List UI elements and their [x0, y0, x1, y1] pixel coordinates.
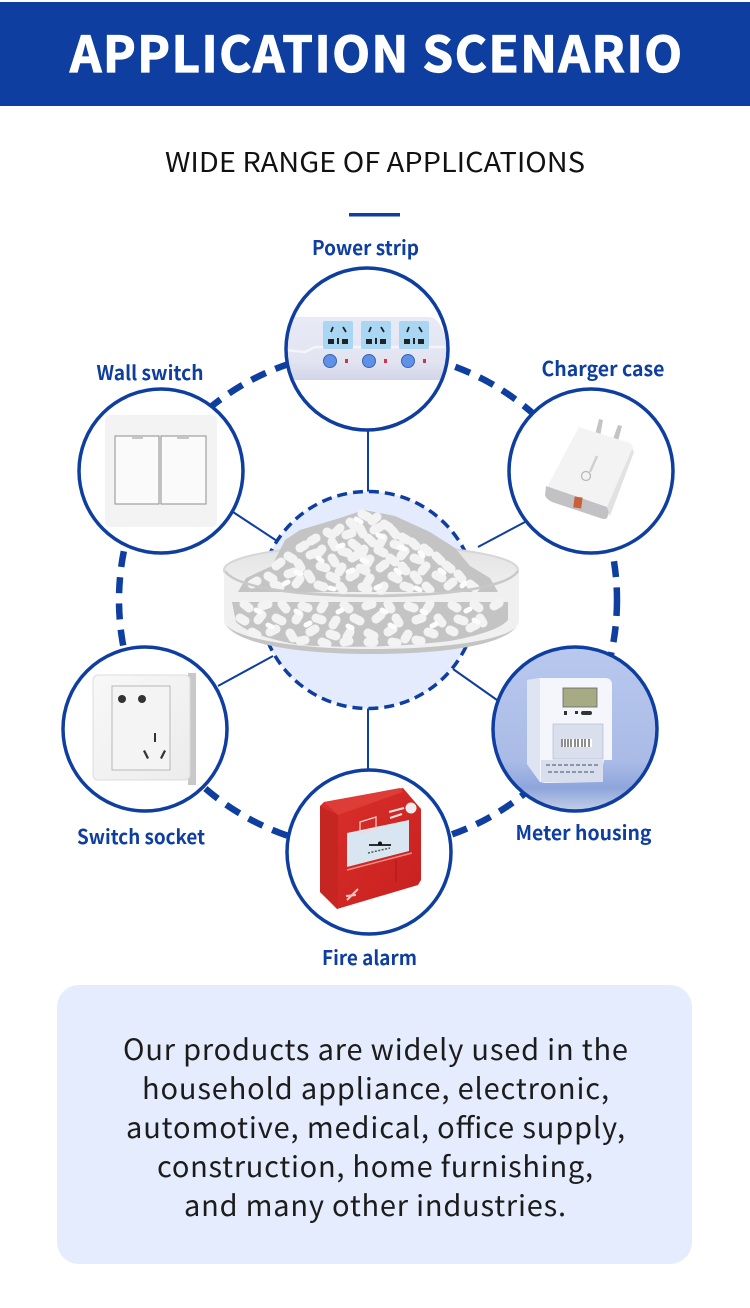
description text	[123, 1027, 628, 1225]
panel: meter housing	[493, 647, 657, 811]
strip body	[285, 317, 450, 380]
description text: construction, home furnishing,	[157, 1144, 593, 1186]
LCD screen	[563, 688, 597, 707]
switch plate	[105, 415, 217, 527]
prongs	[595, 419, 622, 441]
socket face	[112, 686, 170, 770]
switches	[324, 354, 414, 368]
description text: and many other industries.	[184, 1183, 566, 1225]
panel: charger case	[509, 389, 673, 553]
panel: switch socket	[63, 647, 227, 811]
dish body	[224, 570, 519, 653]
panel: wall switch	[79, 389, 243, 553]
terminal block	[541, 760, 603, 782]
socket plate	[188, 673, 196, 785]
dish rim	[225, 571, 518, 596]
header banner	[0, 2, 750, 106]
panel: description	[57, 985, 692, 1264]
description text: Our products are widely used in the	[123, 1027, 628, 1069]
USB port	[573, 496, 583, 508]
label: charger case: Charger case	[542, 353, 664, 382]
connector lines	[218, 430, 525, 770]
central dashed circle	[260, 492, 476, 708]
title: APPLICATION SCENARIO	[69, 16, 682, 87]
label: switch socket: Switch socket	[77, 821, 206, 850]
label: meter housing: Meter housing	[516, 817, 652, 846]
QC logo	[582, 472, 590, 480]
dish back	[224, 545, 518, 595]
description text: automotive, medical, office supply,	[126, 1105, 625, 1147]
label: wall switch: Wall switch	[96, 357, 204, 386]
subtitle accent bar	[349, 213, 400, 216]
alarm window	[347, 820, 409, 867]
subtitle: WIDE RANGE OF APPLICATIONS	[165, 141, 585, 180]
label: fire alarm: Fire alarm	[322, 942, 417, 971]
meter body	[527, 678, 612, 783]
panel: power strip	[285, 268, 450, 430]
dish base	[226, 625, 518, 654]
alarm body	[320, 788, 421, 909]
socket holes	[118, 695, 166, 759]
pellet mound	[232, 510, 508, 647]
charger body	[546, 427, 633, 516]
dashed outer ring	[119, 351, 617, 849]
outlets	[323, 321, 429, 349]
alarm markings	[360, 817, 376, 833]
central dish of white pellets	[224, 510, 519, 654]
meter label	[553, 724, 603, 759]
rockers	[115, 436, 159, 504]
description text: household appliance, electronic,	[142, 1066, 609, 1108]
panel: fire alarm	[287, 770, 451, 934]
label: power strip: Power strip	[312, 232, 419, 261]
